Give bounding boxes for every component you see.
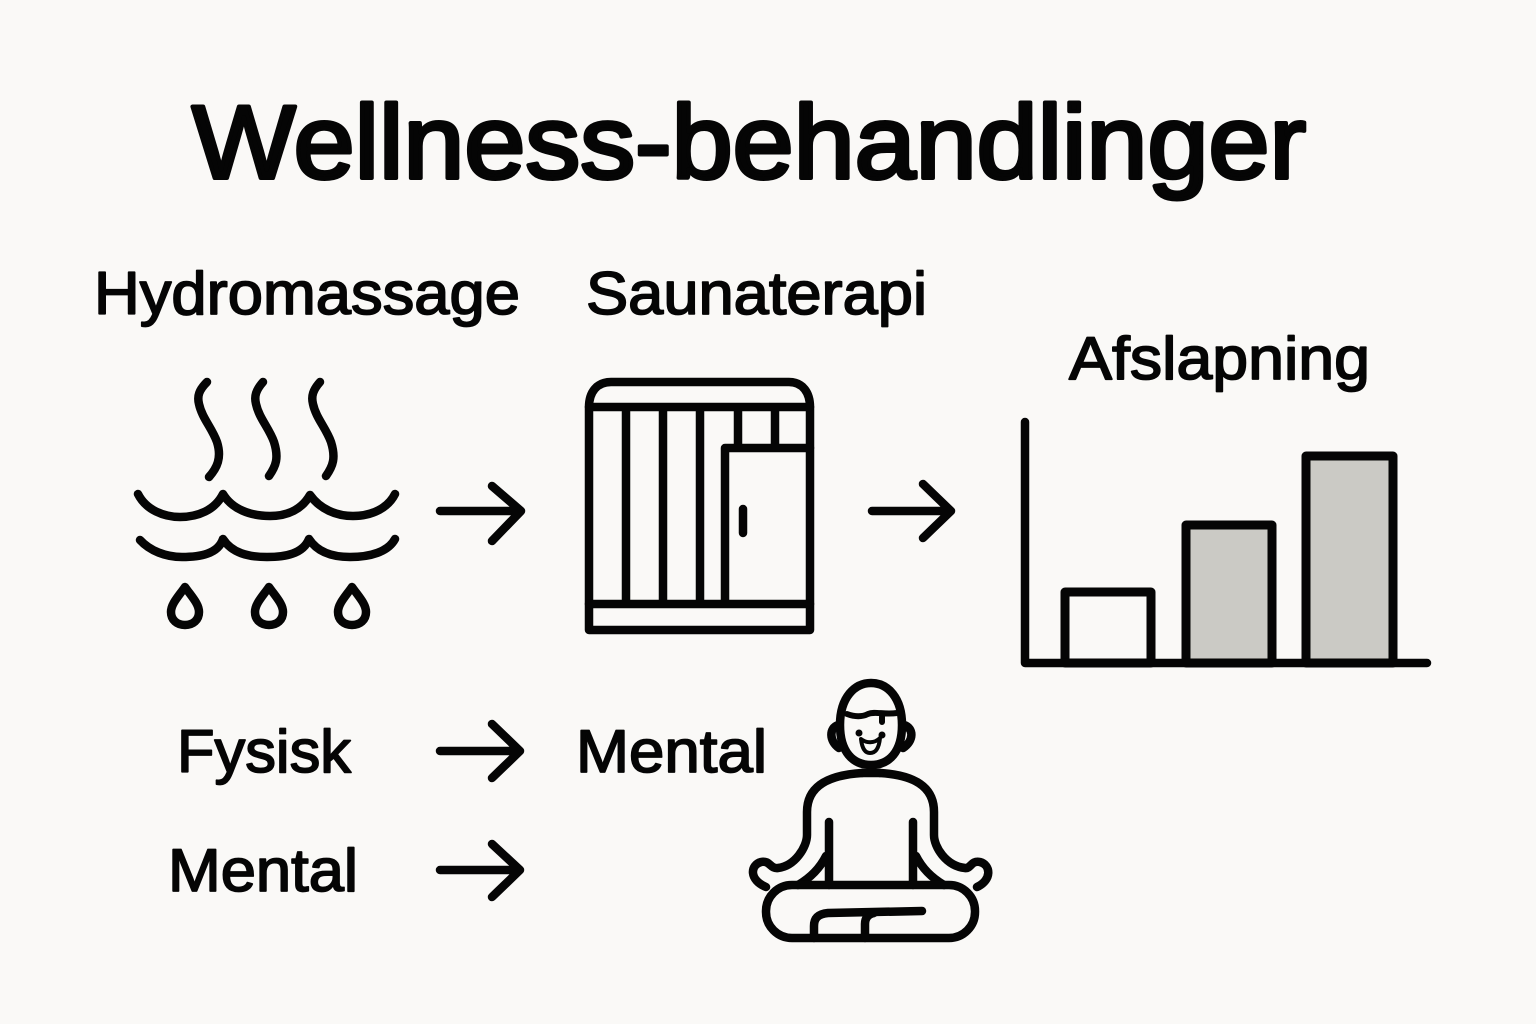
- arrow: physical to mental: [440, 724, 520, 778]
- heading: Saunaterapi: Saunaterapi: [586, 260, 927, 327]
- bar: medium: [1186, 525, 1272, 663]
- bar: low: [1065, 592, 1151, 663]
- chart axes: [1025, 422, 1427, 663]
- icon: crossed legs: [766, 885, 975, 938]
- icon: torso and arms: [753, 773, 988, 887]
- icon: meditating person: [753, 683, 988, 938]
- icon: sauna cabin: [589, 382, 810, 630]
- label: Mental (left): Mental: [168, 837, 358, 904]
- title: Wellness-behandlinger: [192, 85, 1306, 201]
- icon: steam lines: [198, 382, 333, 477]
- icon: water waves: [138, 494, 395, 557]
- arrow: hydromassage to sauna: [440, 486, 521, 541]
- bar chart: relaxation rising: [1025, 422, 1427, 663]
- arrow: sauna to relaxation: [872, 484, 951, 538]
- heading: Hydromassage: Hydromassage: [94, 260, 520, 327]
- heading: Afslapning: Afslapning: [1069, 325, 1370, 392]
- icon: head and face: [831, 683, 911, 765]
- arrow: mental row: [440, 844, 520, 897]
- icon: steam, waves and water drops: [138, 382, 395, 625]
- bar: high: [1306, 456, 1393, 663]
- icon: water drops: [171, 587, 366, 625]
- label: Mental (right): Mental: [576, 718, 767, 785]
- label: Fysisk: Fysisk: [177, 718, 352, 785]
